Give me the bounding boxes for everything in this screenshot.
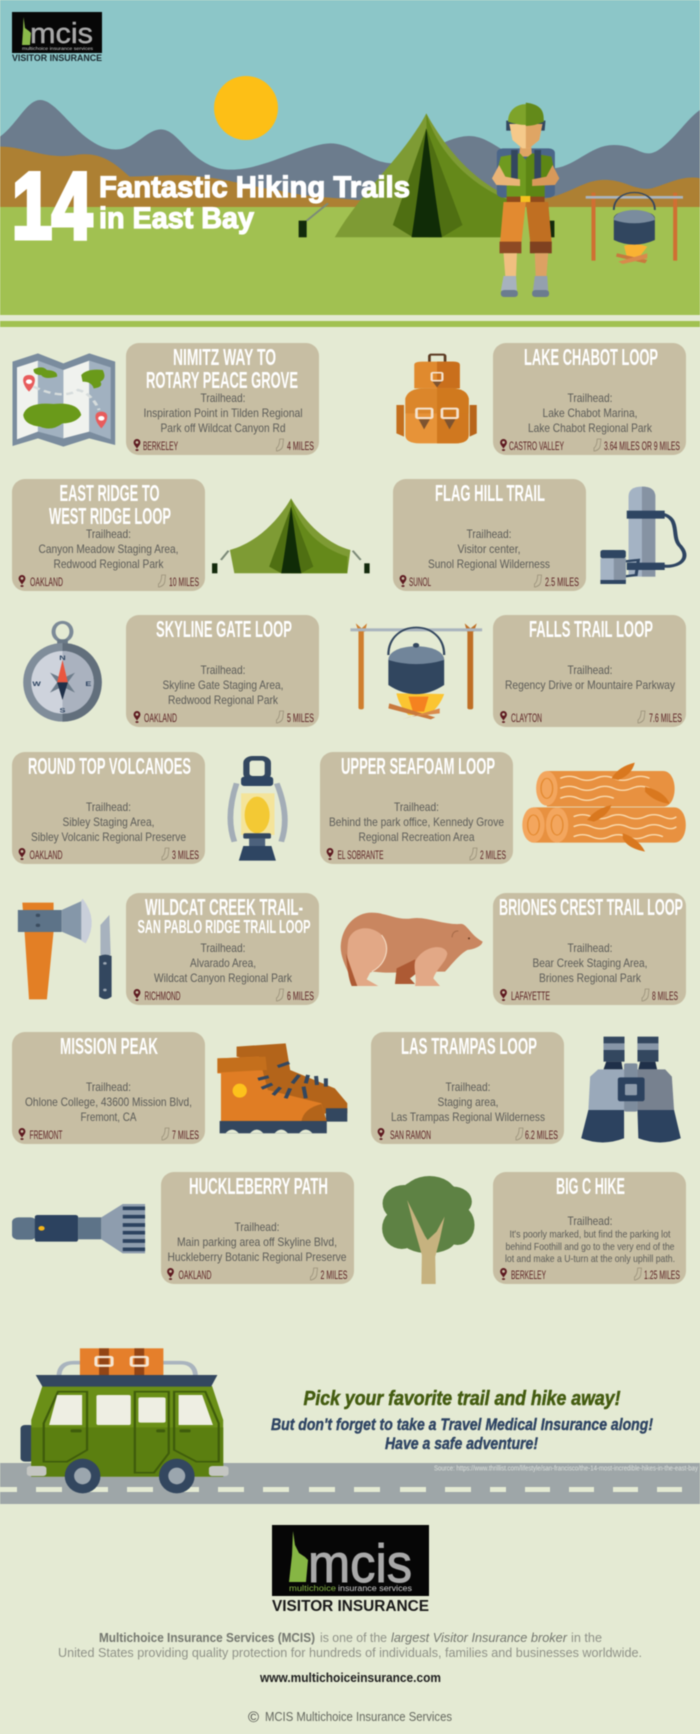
location <box>134 711 177 725</box>
trailhead text: Ohlone College, 43600 Mission Blvd, <box>25 1095 192 1109</box>
copyright <box>248 1709 452 1726</box>
card title: NIMITZ WAY TO <box>173 344 276 370</box>
location <box>19 1128 63 1142</box>
location: OAKLAND <box>30 850 62 862</box>
card title: MISSION PEAK <box>60 1033 158 1059</box>
card title: UPPER SEAFOAM LOOP <box>341 753 495 779</box>
location: SUNOL <box>409 577 431 589</box>
trailhead text: Inspiration Point in Tilden Regional <box>144 406 302 420</box>
card: Lake Chabot <box>493 343 686 455</box>
mountains <box>0 100 700 208</box>
distance: 3 MILES <box>172 850 199 862</box>
distance <box>276 439 314 453</box>
about text: Multichoice Insurance Services (MCIS) <box>99 1631 315 1645</box>
about text: is one of the <box>320 1631 387 1645</box>
distance: 7 MILES <box>172 1130 199 1142</box>
distance <box>594 439 680 453</box>
trailhead text: Trailhead: <box>86 527 131 541</box>
icon: compass: N <box>59 654 66 662</box>
road <box>0 1463 700 1504</box>
card title: LAS TRAMPAS LOOP <box>401 1033 537 1059</box>
icon: tent <box>212 498 370 573</box>
distance <box>158 575 199 589</box>
distance <box>516 1128 558 1142</box>
trailhead text: It's poorly marked, but find the parking lot <box>510 1228 671 1240</box>
card title: SKYLINE GATE LOOP <box>156 616 292 642</box>
trailhead text <box>428 527 550 571</box>
location: FREMONT <box>30 1130 62 1142</box>
main title <box>12 153 410 258</box>
distance: 4 MILES <box>287 441 314 453</box>
trailhead text: Fremont, CA <box>80 1110 136 1124</box>
logo top: multichoice insurance services <box>22 46 94 51</box>
about text: largest Visitor Insurance broker <box>391 1631 568 1645</box>
trailhead text: Redwood Regional Park <box>54 557 164 571</box>
distance <box>162 1128 199 1142</box>
card title: WEST RIDGE LOOP <box>49 503 171 529</box>
icon: campfire pot <box>350 623 482 719</box>
trailhead text <box>168 1220 347 1264</box>
trailhead text: Redwood Regional Park <box>168 693 279 707</box>
trailhead text: Trailhead: <box>200 391 246 405</box>
trailhead text: Trailhead: <box>466 527 512 541</box>
title line 2: in East Bay <box>99 202 254 235</box>
logo bottom <box>272 1525 429 1615</box>
icon: tree <box>382 1176 475 1284</box>
trailhead text: Park off Wildcat Canyon Rd <box>160 421 286 435</box>
distance <box>638 711 682 725</box>
trailhead text: Trailhead: <box>568 391 612 405</box>
logo bottom: mcis <box>308 1534 412 1594</box>
trailhead text <box>25 1080 192 1124</box>
trailhead text: Alvarado Area, <box>190 956 256 970</box>
trailhead text: Main parking area off Skyline Blvd, <box>177 1235 337 1249</box>
location <box>19 848 63 862</box>
logo bottom: insurance services <box>338 1584 412 1593</box>
card: Wildcat Creek <box>126 893 319 1005</box>
location <box>19 575 63 589</box>
logo bottom: VISITOR INSURANCE <box>272 1598 429 1615</box>
distance: 2.5 MILES <box>545 577 579 589</box>
icon: compass: W <box>32 680 41 688</box>
card: Falls Trail <box>493 615 686 727</box>
trailhead text: Trailhead: <box>568 941 612 955</box>
card title <box>138 894 310 937</box>
location <box>378 1128 431 1142</box>
trailhead text <box>144 391 302 435</box>
card: Mission Peak <box>12 1032 205 1144</box>
card: East Ridge <box>12 479 205 591</box>
location <box>400 575 431 589</box>
distance <box>642 989 678 1003</box>
trailhead text <box>31 800 186 844</box>
call to action <box>271 1388 653 1453</box>
trailhead text: Bear Creek Staging Area, <box>532 956 648 970</box>
trailhead text <box>154 941 293 985</box>
trailhead text <box>329 800 504 844</box>
location <box>500 439 564 453</box>
trailhead text: Las Trampas Regional Wilderness <box>391 1110 545 1124</box>
trailhead text: Trailhead: <box>568 1214 612 1228</box>
trailhead text: Lake Chabot Regional Park <box>528 421 653 435</box>
trailhead text: Sunol Regional Wilderness <box>428 557 550 571</box>
trailhead text <box>528 391 653 435</box>
location: OAKLAND <box>144 713 177 725</box>
card title: WILDCAT CREEK TRAIL- <box>145 894 303 920</box>
distance: 6 MILES <box>287 991 314 1003</box>
location: OAKLAND <box>178 1270 212 1282</box>
distance: 2 MILES <box>480 850 506 862</box>
card: Nimitz Way <box>126 343 319 455</box>
trailhead text: Huckleberry Botanic Regional Preserve <box>168 1250 347 1264</box>
trailhead text: Regional Recreation Area <box>358 830 475 844</box>
heading green: Pick your favorite trail and hike away! <box>304 1388 621 1410</box>
about text: United States providing quality protection for hundreds of individuals, families and businesses worldwide. <box>58 1646 642 1660</box>
icon: lantern <box>230 758 285 861</box>
trailhead text: Trailhead: <box>234 1220 280 1234</box>
trailhead text: Trailhead: <box>200 663 246 677</box>
card: Huckleberry <box>161 1172 354 1284</box>
card: Skyline Gate <box>126 615 319 727</box>
trailhead text <box>162 663 284 707</box>
icon: axe and knife <box>18 899 112 999</box>
sun <box>214 76 278 140</box>
hero scene <box>0 0 700 321</box>
icon: map <box>12 353 115 447</box>
copyright: MCIS Multichoice Insurance Services <box>265 1710 452 1724</box>
location: CASTRO VALLEY <box>509 441 564 453</box>
location <box>500 711 542 725</box>
location <box>167 1268 212 1282</box>
logo top: mcis <box>30 18 93 50</box>
card: Round Top <box>12 752 205 864</box>
icon: boots <box>217 1043 347 1133</box>
card title: ROUND TOP VOLCANOES <box>28 753 191 779</box>
location: OAKLAND <box>30 577 63 589</box>
icon: compass: E <box>85 680 91 688</box>
location: LAFAYETTE <box>511 991 550 1003</box>
card title: EAST RIDGE TO <box>60 480 160 506</box>
title line 1: Fantastic Hiking Trails <box>99 171 410 204</box>
logo bottom: multichoice <box>289 1584 337 1593</box>
grass <box>0 207 700 315</box>
trailhead text <box>532 941 648 985</box>
trailhead text: Trailhead: <box>86 1080 131 1094</box>
location: SAN RAMON <box>390 1130 431 1142</box>
location <box>500 1268 546 1282</box>
green stripe <box>0 321 700 327</box>
distance: 5 MILES <box>287 713 314 725</box>
location: CLAYTON <box>511 713 542 725</box>
distance <box>162 848 199 862</box>
trailhead text <box>38 527 178 571</box>
trailhead text: Trailhead: <box>86 800 131 814</box>
card title <box>146 344 298 393</box>
trailhead text <box>505 1214 675 1265</box>
distance: 6.2 MILES <box>525 1130 558 1142</box>
safe adventure line: Have a safe adventure! <box>385 1434 538 1453</box>
trailhead text: Skyline Gate Staging Area, <box>162 678 284 692</box>
trailhead text <box>505 663 675 692</box>
distance: 10 MILES <box>169 577 199 589</box>
location <box>500 989 550 1003</box>
location: RICHMOND <box>144 991 180 1003</box>
card title: FLAG HILL TRAIL <box>435 480 545 506</box>
trailhead text: Trailhead: <box>394 800 439 814</box>
card title: SAN PABLO RIDGE TRAIL LOOP <box>138 916 310 937</box>
icon: compass: S <box>60 707 65 714</box>
distance <box>470 848 506 862</box>
card: Big C <box>493 1172 686 1284</box>
copyright: © <box>248 1709 259 1726</box>
icon: van <box>21 1348 229 1493</box>
website: www.multichoiceinsurance.com <box>259 1670 441 1685</box>
location: BERKELEY <box>511 1270 546 1282</box>
hiker <box>492 103 559 297</box>
trailhead text: Lake Chabot Marina, <box>542 406 638 420</box>
location: BERKELEY <box>143 441 178 453</box>
about text <box>58 1631 642 1660</box>
trailhead text: Canyon Meadow Staging Area, <box>38 542 178 556</box>
tent and pegs <box>299 113 554 237</box>
sky <box>0 0 700 208</box>
distance <box>534 575 579 589</box>
distance <box>276 711 314 725</box>
card: Briones Crest <box>493 893 686 1005</box>
stripe bars <box>0 315 700 321</box>
location <box>134 989 180 1003</box>
distance: 2 MILES <box>320 1270 348 1282</box>
card title: ROTARY PEACE GROVE <box>146 367 298 393</box>
distance <box>634 1268 680 1282</box>
distance <box>276 989 314 1003</box>
number 14: 14 <box>12 153 92 258</box>
about text: in the <box>571 1631 602 1645</box>
card: Las Trampas <box>371 1032 564 1144</box>
card title: BIG C HIKE <box>556 1173 625 1199</box>
location <box>134 439 178 453</box>
trailhead text: Staging area, <box>438 1095 498 1109</box>
card: Flag Hill <box>393 479 586 591</box>
icon: compass <box>23 622 102 722</box>
logo top: VISITOR INSURANCE <box>12 53 102 64</box>
icon: backpack <box>396 355 477 443</box>
trailhead text: Regency Drive or Mountaire Parkway <box>505 678 675 692</box>
icon: thermos <box>600 487 684 584</box>
trailhead text: Trailhead: <box>446 1080 490 1094</box>
card: Upper Seafoam <box>320 752 513 864</box>
distance <box>310 1268 348 1282</box>
icon: bear <box>341 913 483 986</box>
trailhead text: Sibley Staging Area, <box>62 815 154 829</box>
trailhead text: Sibley Volcanic Regional Preserve <box>31 830 186 844</box>
trailhead text: Behind the park office, Kennedy Grove <box>329 815 504 829</box>
trailhead text: Briones Regional Park <box>539 971 642 985</box>
distance: 8 MILES <box>652 991 678 1003</box>
location <box>327 848 384 862</box>
trailhead text <box>391 1080 545 1124</box>
trailhead text: Wildcat Canyon Regional Park <box>154 971 293 985</box>
trailhead text: Trailhead: <box>200 941 246 955</box>
icon: logs <box>522 763 686 852</box>
logo top <box>12 12 102 64</box>
trailhead text: Visitor center, <box>458 542 520 556</box>
location: EL SOBRANTE <box>338 850 384 862</box>
icon: binoculars <box>581 1037 681 1142</box>
card title <box>49 480 171 529</box>
card title: HUCKLEBERRY PATH <box>189 1173 328 1199</box>
trailhead text: Trailhead: <box>568 663 612 677</box>
icon: flashlight <box>12 1204 145 1253</box>
cooking pot over fire <box>586 192 683 264</box>
